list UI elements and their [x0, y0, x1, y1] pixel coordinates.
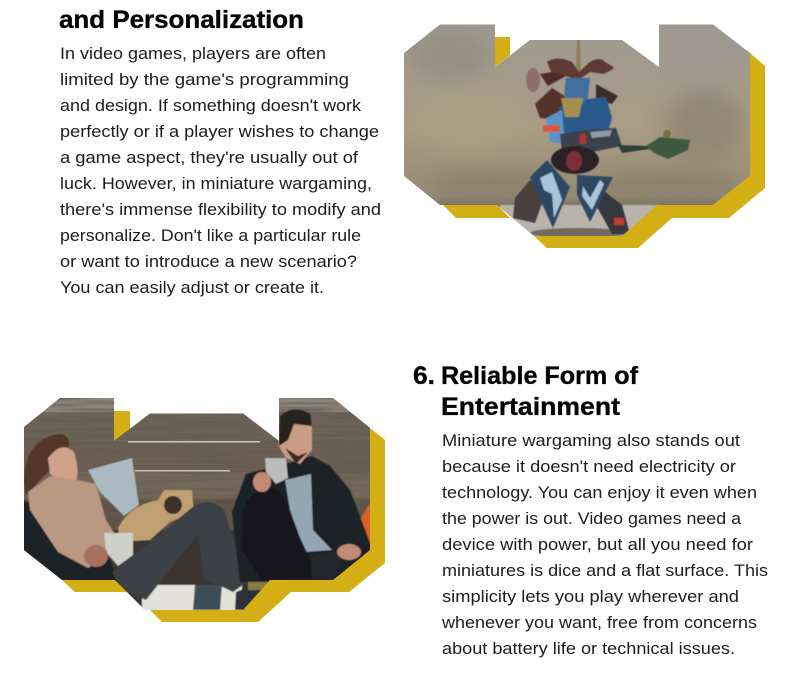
skulls [526, 68, 540, 92]
orange cushion [360, 503, 370, 550]
pillow [88, 458, 139, 516]
socks [193, 585, 222, 610]
woman hair [24, 434, 69, 496]
text block: reliable entertainment body: miniatures is dice and a flat surface. This [442, 561, 768, 580]
man hair [279, 409, 312, 446]
staff [576, 40, 582, 72]
text block: reliable entertainment body: technology. You can enjoy it even when [442, 483, 757, 502]
text block: personalization body: luck. However, in miniature wargaming, [60, 174, 372, 193]
woman hand [84, 545, 108, 567]
antlers [547, 58, 615, 80]
wood planks [20, 395, 375, 530]
photo: painted troll miniature [400, 20, 755, 240]
man beard [285, 448, 308, 464]
text block: personalization body: limited by the game's programming [60, 70, 349, 89]
man t-shirt [285, 474, 332, 552]
text block: personalization body: a game aspect, they're usually out of [60, 148, 358, 167]
arm and bracers [546, 110, 565, 144]
woman face [48, 447, 78, 482]
pug [118, 490, 194, 542]
text block: personalization body: In video games, players are often [60, 44, 326, 63]
gold offset frame [443, 37, 765, 248]
text block: reliable entertainment body [441, 431, 768, 658]
man jacket [232, 456, 372, 582]
text block: personalization body: and design. If something doesn't work [60, 96, 362, 115]
skirt panels [530, 160, 570, 228]
panel: miniature photo with gold frame [400, 20, 765, 248]
woman coat [20, 500, 118, 582]
man hands [253, 472, 271, 492]
text block: reliable entertainment body: the power is out. Video games need a [442, 509, 742, 528]
text block: personalization body [60, 44, 381, 297]
man mug [265, 458, 288, 484]
scarf [28, 476, 122, 568]
dark floor [107, 530, 370, 608]
text block: reliable entertainment body: device with power, but all you need for [442, 535, 753, 554]
text block: reliable entertainment body: because it doesn't need electricity or [442, 457, 736, 476]
photo: couple with pug on a wooden deck [20, 395, 375, 615]
text block: personalization body: perfectly or if a player wishes to change [60, 122, 379, 141]
head [564, 78, 590, 108]
text block: personalization body: there's immense flexibility to modify and [60, 200, 381, 219]
heading: 6. Reliable Form of Entertainment: Reliable Form of [441, 362, 639, 390]
heading: 6. Reliable Form of Entertainment [413, 362, 639, 421]
text block: reliable entertainment body: Miniature wargaming also stands out [442, 431, 740, 450]
heading: 6. Reliable Form of Entertainment: 6. [413, 362, 435, 390]
text block: personalization body: personalize. Don't like a particular rule [60, 226, 361, 245]
text block: personalization body: You can easily adjust or create it. [60, 278, 324, 297]
text block: reliable entertainment body: about battery life or technical issues. [442, 639, 735, 658]
mace [618, 145, 650, 153]
man head [278, 424, 312, 464]
woman mug [104, 533, 133, 566]
text block: personalization body: or want to introduce a new scenario? [60, 252, 357, 271]
shoulder fur [535, 88, 566, 120]
heading: 6. Reliable Form of Entertainment: Entertainment [441, 393, 621, 421]
blanket on floor [142, 585, 242, 611]
legs [513, 180, 546, 223]
gold offset frame [62, 411, 385, 622]
text block: reliable entertainment body: simplicity lets you play wherever and [442, 587, 739, 606]
panel: couple photo with gold frame [20, 395, 385, 622]
man jeans [242, 488, 312, 580]
pelvis [551, 146, 599, 174]
woman jeans [112, 502, 247, 600]
torso [558, 97, 612, 140]
heading: and Personalization: and Personalization [59, 6, 304, 34]
text block: reliable entertainment body: whenever you want, free from concerns [441, 613, 757, 632]
